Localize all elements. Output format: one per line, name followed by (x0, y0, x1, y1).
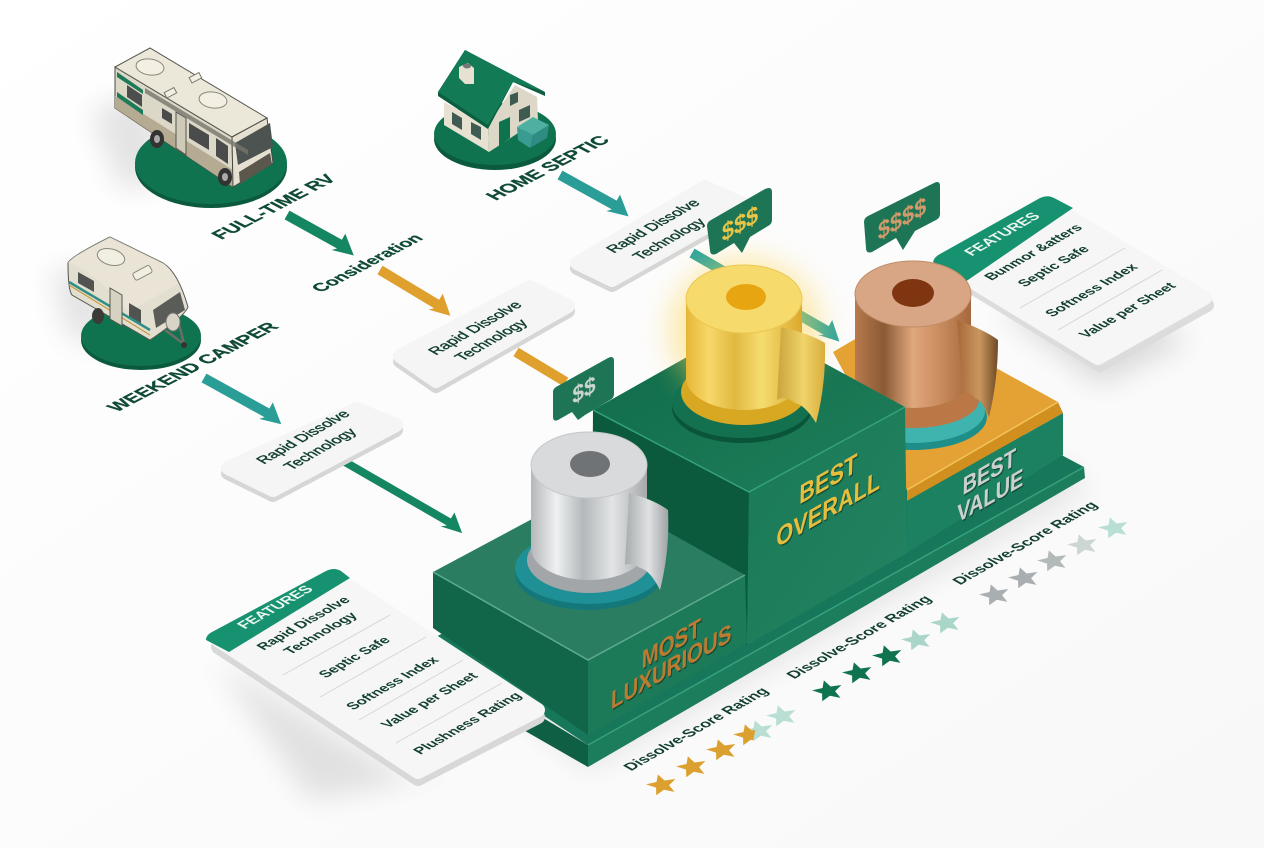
icon: full-time RV on disk (115, 48, 287, 208)
panel: features card, bottom left: Rapid Dissolve (252, 594, 354, 652)
tier: best value block (833, 314, 1063, 553)
arrow: orange link to price tag (513, 348, 568, 386)
soft shadow layer (50, 90, 1190, 800)
rating: best value: Dissolve-Score Rating (949, 499, 1102, 587)
icon: weekend camper on disk (68, 237, 201, 370)
panel: features card, top right: FEATURES (960, 210, 1044, 258)
podium (430, 258, 1085, 767)
rating: best overall (783, 593, 964, 702)
tier: most luxurious block (433, 488, 747, 735)
panel: features card, bottom left: FEATURES (233, 583, 317, 631)
rating: most luxurious (620, 685, 800, 796)
panel: features card, bottom left: Softness Index (342, 654, 442, 712)
card: rapid dissolve, consideration (400, 287, 568, 386)
card: rapid dissolve, consideration: Rapid Dissolve (425, 299, 526, 357)
card: rapid dissolve, weekend camper (228, 408, 396, 495)
price tag: two dollars (553, 357, 614, 421)
card: rapid dissolve, weekend camper: Rapid Dissolve (253, 408, 354, 466)
card: rapid dissolve, home septic (577, 187, 745, 285)
panel: features card, bottom left (206, 569, 538, 779)
panel: features card, bottom left: Value per Sheet (377, 670, 482, 730)
label: full-time RV: FULL-TIME RV (206, 171, 341, 242)
gold roll with glow (669, 258, 825, 443)
label: most luxurious: MOST (641, 613, 701, 675)
panel: features card, top right: Value per Sheet (1075, 280, 1180, 340)
arrow: consideration to card (375, 260, 458, 321)
podium base platform (430, 380, 1085, 767)
features header (933, 196, 1073, 282)
arrow: card to silver tier (341, 452, 469, 537)
price tag: four dollars: $$$$ (878, 191, 926, 247)
panel: features card, bottom left: Septic Safe (314, 634, 394, 680)
card: rapid dissolve, home septic: Rapid Dissolve (603, 197, 704, 255)
arrow: full-time RV to consideration (283, 205, 361, 261)
panel: features card, top right: Septic Safe (1013, 243, 1093, 289)
label: best overall: BEST (799, 446, 858, 511)
icon: home septic on disk (434, 50, 556, 170)
label: best value: BEST (962, 443, 1017, 502)
tier: best overall block (592, 322, 907, 645)
label: home septic: HOME SEPTIC (481, 133, 615, 203)
silver roll with teal ring (515, 432, 668, 610)
card: rapid dissolve, weekend camper: Technology (280, 426, 361, 472)
features header (206, 569, 350, 652)
label: weekend camper: WEEKEND CAMPER (102, 319, 283, 414)
price tag: four dollars (864, 182, 940, 252)
price tag: two dollars: $$ (572, 370, 596, 411)
arrow: home septic to card (556, 165, 636, 222)
label: most luxurious: LUXURIOUS (611, 619, 732, 716)
price tag: three dollars (707, 188, 772, 254)
card: rapid dissolve, consideration: Technology (451, 317, 532, 363)
card: rapid dissolve, home septic: Technology (629, 216, 710, 262)
arrow: teal link to copper tier (688, 243, 847, 346)
panel: features card, top right: Softness Index (1041, 261, 1141, 319)
label: best overall: OVERALL (776, 463, 881, 554)
rating: best value (949, 499, 1132, 606)
rating: most luxurious: Dissolve-Score Rating (620, 685, 773, 773)
price tag: three dollars: $$$ (722, 200, 758, 248)
panel: features card, bottom left: Plushness Rating (409, 690, 525, 756)
rating: best overall: Dissolve-Score Rating (783, 593, 936, 681)
label: consideration: Consideration (306, 231, 428, 295)
copper roll with teal ring (839, 261, 998, 450)
panel: features card, top right (933, 196, 1207, 365)
arrow: weekend camper to card (200, 368, 289, 430)
panel: features card, bottom left: Technology (279, 610, 361, 656)
panel: features card, top right: Bunmor &atters (980, 222, 1086, 282)
label: best value: VALUE (957, 463, 1024, 529)
